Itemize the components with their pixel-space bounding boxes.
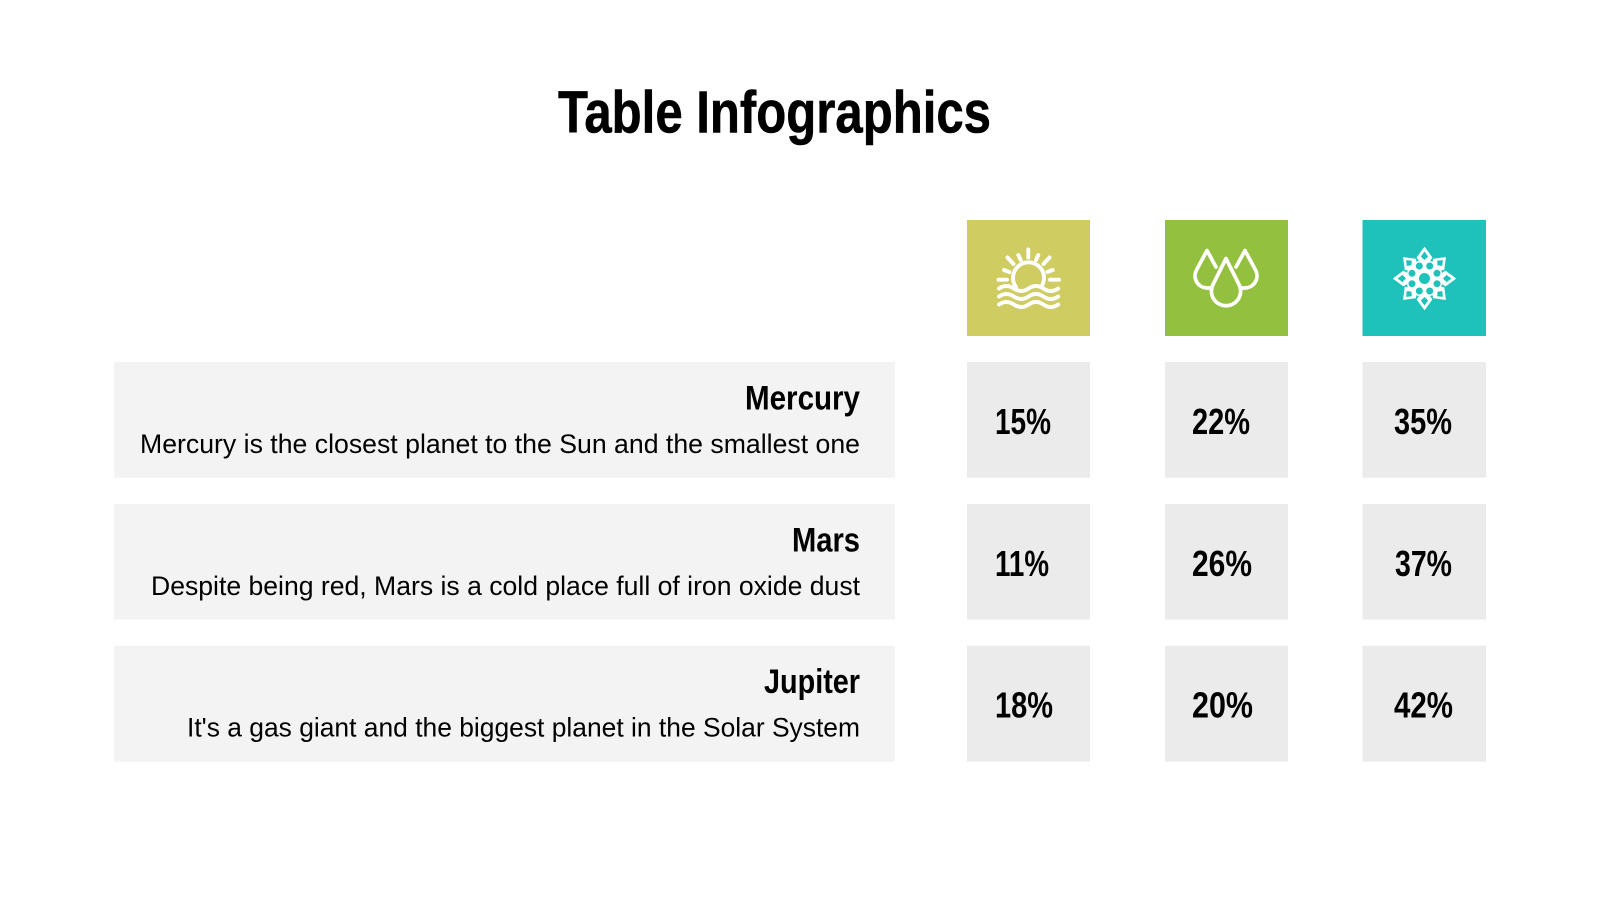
cell: Mercury sun 15%: 15% (995, 401, 1051, 442)
cell: Jupiter sun 18%: 18% (995, 685, 1053, 726)
cell: Jupiter snow 42%: 42% (1394, 685, 1453, 726)
row name: Jupiter: Jupiter (764, 663, 860, 701)
icon tile: sun over water (967, 220, 1090, 336)
cell: Jupiter sun 18% (967, 646, 1090, 762)
cell: Mars snow 37% (1362, 504, 1486, 620)
row panel: Mars (114, 504, 895, 620)
title: Table Infographics (558, 80, 991, 146)
row panel: Jupiter (114, 646, 895, 762)
cell: Mercury water 22% (1165, 362, 1288, 478)
cell: Mercury snow 35% (1362, 362, 1486, 478)
cell: Mars snow 37%: 37% (1395, 543, 1452, 584)
icon tile: water drops (1165, 220, 1288, 336)
icon tile: snowflake (1362, 220, 1486, 336)
row name: Mercury: Mercury (745, 380, 860, 418)
row description: Mercury: Mercury is the closest planet to the Sun and the smallest one (140, 429, 860, 459)
cell: Mercury snow 35%: 35% (1394, 401, 1452, 442)
row panel: Mercury (114, 362, 895, 478)
cell: Mars water 26%: 26% (1192, 543, 1252, 584)
row name: Mars: Mars (792, 522, 860, 560)
cell: Mercury sun 15% (967, 362, 1090, 478)
cell: Mercury water 22%: 22% (1192, 401, 1250, 442)
cell: Jupiter water 20%: 20% (1192, 685, 1253, 726)
cell: Jupiter snow 42% (1362, 646, 1486, 762)
cell: Jupiter water 20% (1165, 646, 1288, 762)
row description: Jupiter: It's a gas giant and the biggest planet in the Solar System (187, 713, 860, 743)
cell: Mars sun 11% (967, 504, 1090, 620)
cell: Mars water 26% (1165, 504, 1288, 620)
row description: Mars: Despite being red, Mars is a cold place full of iron oxide dust (151, 571, 861, 601)
cell: Mars sun 11%: 11% (995, 543, 1049, 584)
